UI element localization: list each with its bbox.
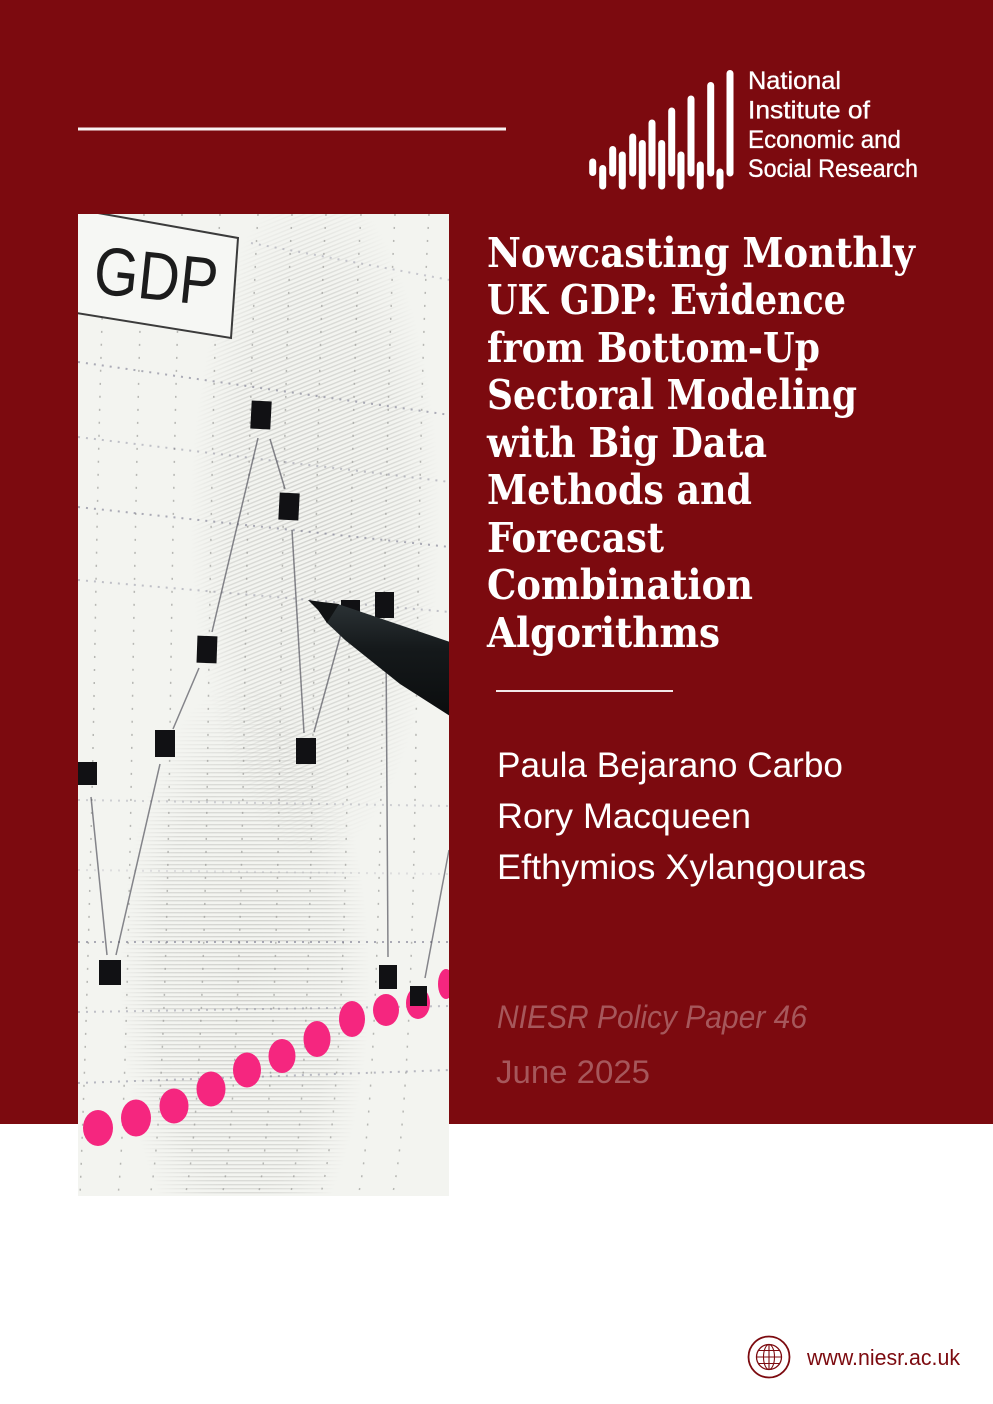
title: Methods and — [487, 466, 752, 514]
authors: Paula Bejarano Carbo — [497, 746, 843, 785]
title: from Bottom-Up — [487, 324, 820, 372]
logo wordmark: Institute of — [748, 96, 870, 124]
title: Forecast — [487, 514, 664, 562]
GDP label box — [70, 208, 238, 338]
logo: National Institute of Economic and Social Research — [593, 67, 918, 186]
title — [486, 229, 916, 657]
icon: globe — [748, 1336, 790, 1378]
pen — [308, 600, 450, 716]
logo wordmark: National — [748, 67, 841, 95]
authors: Rory Macqueen — [497, 797, 751, 836]
series and date: June 2025 — [496, 1054, 650, 1090]
title divider — [496, 690, 673, 692]
authors — [497, 746, 866, 887]
top rule — [78, 128, 506, 130]
logo wordmark: Economic and — [748, 126, 901, 154]
logo wordmark: Social Research — [748, 155, 918, 183]
website url: www.niesr.ac.uk — [806, 1345, 961, 1370]
GDP label box: GDP — [90, 232, 222, 321]
title: with Big Data — [486, 419, 767, 467]
authors: Efthymios Xylangouras — [497, 848, 866, 887]
footer website link — [748, 1336, 961, 1378]
title: Nowcasting Monthly — [487, 229, 916, 277]
title: Sectoral Modeling — [487, 371, 857, 419]
black data points — [78, 400, 427, 1006]
logo wordmark — [748, 67, 918, 183]
pink data points — [83, 969, 454, 1146]
series and date: NIESR Policy Paper 46 — [497, 999, 807, 1035]
title: Combination — [487, 561, 753, 609]
icon: logo bars — [593, 74, 730, 186]
title: UK GDP: Evidence — [487, 276, 846, 324]
photo: GDP chart on screen with pen — [70, 208, 454, 1196]
chart connector lines — [91, 438, 449, 978]
series and date — [496, 999, 807, 1090]
title: Algorithms — [486, 609, 720, 657]
